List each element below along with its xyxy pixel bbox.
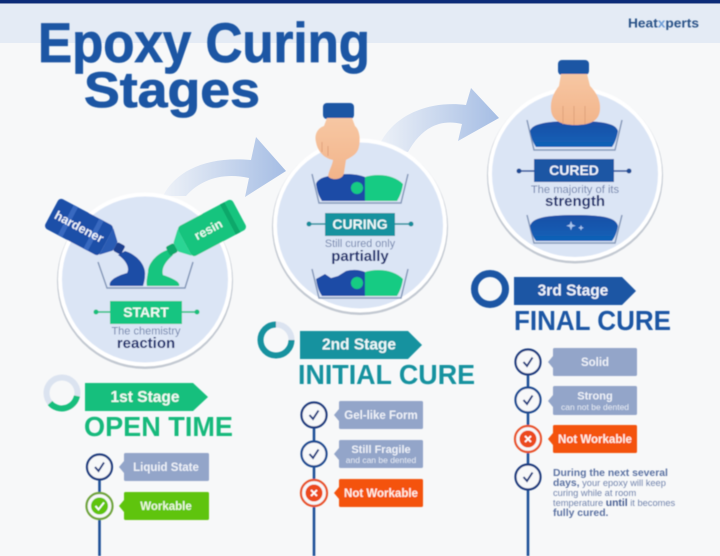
label: cured bbox=[516, 159, 632, 182]
panel: stage 1 bbox=[46, 378, 233, 556]
icon: progress ring 2 bbox=[260, 324, 292, 356]
banner: 2nd stage bbox=[300, 331, 422, 359]
panel: curing circle bbox=[272, 103, 448, 315]
checkpoint: not workable: Not Workable bbox=[344, 488, 418, 500]
arrow: start to curing bbox=[163, 137, 286, 197]
caption: cured partially bbox=[325, 238, 396, 265]
label: start bbox=[94, 301, 200, 324]
tub bbox=[98, 262, 193, 288]
tub top bbox=[312, 174, 408, 203]
checkpoint: solid bbox=[516, 348, 637, 376]
checkpoint: still fragile: and can be dented bbox=[346, 455, 416, 465]
title: Stages bbox=[84, 62, 260, 118]
caption: majority of strength bbox=[531, 184, 620, 210]
title bbox=[38, 11, 370, 118]
checkpoint: gel-like form bbox=[302, 401, 423, 429]
checkpoint: still fragile: Still Fragile bbox=[351, 444, 411, 456]
icon: progress ring 1 bbox=[46, 378, 78, 408]
banner: 3rd stage: 3rd Stage bbox=[538, 282, 609, 300]
checkpoint: next several days bbox=[516, 464, 678, 519]
checkpoint: workable bbox=[86, 492, 209, 520]
checkpoint: next several days: fully cured. bbox=[553, 508, 609, 519]
tub top bbox=[527, 120, 622, 150]
checkpoint: liquid state: Liquid State bbox=[133, 462, 199, 474]
checkpoint: not workable: Not Workable bbox=[558, 434, 632, 446]
icon: progress ring 3 bbox=[474, 274, 506, 304]
icon: pointing hand bbox=[315, 103, 360, 179]
banner: 1st stage: 1st Stage bbox=[111, 389, 180, 406]
label: curing: CURING bbox=[332, 216, 388, 232]
checkpoint: next several days: temperature until it becomes bbox=[553, 498, 675, 509]
panel: start circle bbox=[44, 192, 247, 369]
checkpoint: liquid state bbox=[87, 453, 209, 481]
banner: 3rd stage bbox=[514, 277, 636, 305]
checkpoint: not workable bbox=[301, 479, 423, 507]
bottle: hardener bbox=[44, 197, 131, 265]
heading: open time: OPEN TIME bbox=[84, 411, 233, 442]
checkpoint: not workable bbox=[515, 425, 637, 453]
arrow: curing to cured bbox=[378, 88, 499, 152]
panel: stage 2 bbox=[260, 324, 475, 556]
caption: cured partially: partially bbox=[331, 248, 389, 265]
tub bottom bbox=[527, 215, 622, 243]
logo: Heatxperts bbox=[628, 16, 699, 30]
title: Epoxy Curing bbox=[38, 11, 370, 74]
hardener liquid bbox=[110, 251, 145, 286]
heading: initial cure: INITIAL CURE bbox=[298, 359, 475, 390]
bottle: resin bbox=[160, 198, 247, 266]
heading: final cure: FINAL CURE bbox=[514, 305, 671, 336]
banner: 1st stage bbox=[85, 383, 208, 411]
checkpoint: next several days: During the next several bbox=[553, 468, 668, 479]
icon: fist bbox=[551, 60, 600, 125]
panel: stage 3 bbox=[474, 274, 678, 556]
checkpoint: strong: can not be dented bbox=[561, 402, 629, 412]
caption: majority of strength: strength bbox=[545, 193, 605, 210]
checkpoint: solid: Solid bbox=[581, 357, 609, 369]
checkpoint: strong: Strong bbox=[577, 390, 613, 402]
label: curing bbox=[306, 213, 414, 236]
bottle: resin: resin bbox=[192, 217, 225, 243]
caption: chemistry reaction bbox=[111, 326, 181, 352]
label: cured: CURED bbox=[549, 162, 599, 178]
bottle: hardener: hardener bbox=[52, 208, 106, 246]
banner: 2nd stage: 2nd Stage bbox=[322, 336, 396, 354]
caption: chemistry reaction: The chemistry bbox=[111, 326, 181, 338]
panel: cured circle bbox=[487, 60, 663, 264]
resin liquid bbox=[147, 250, 179, 286]
checkpoint: still fragile bbox=[302, 440, 423, 468]
checkpoint: workable: Workable bbox=[140, 501, 192, 513]
checkpoint: next several days: curing while at room bbox=[553, 488, 636, 498]
checkpoint: gel-like form: Gel-like Form bbox=[344, 410, 418, 422]
checkpoint: next several days: days, your epoxy will keep bbox=[553, 478, 666, 489]
label: start: START bbox=[123, 304, 169, 320]
caption: majority of strength: The majority of its bbox=[531, 184, 620, 196]
caption: cured partially: Still cured only bbox=[325, 238, 396, 250]
caption: chemistry reaction: reaction bbox=[117, 335, 175, 352]
tub bottom bbox=[312, 269, 408, 298]
checkpoint: strong bbox=[516, 386, 637, 415]
